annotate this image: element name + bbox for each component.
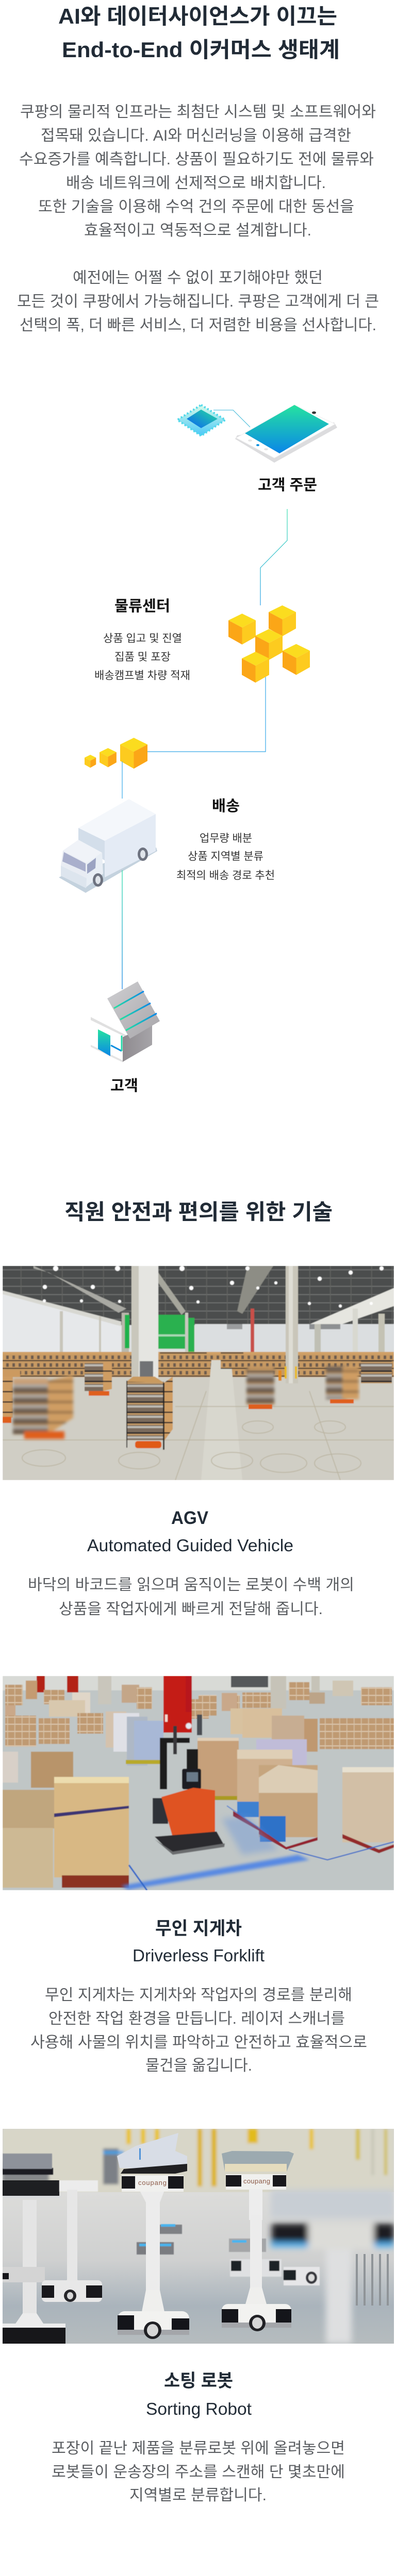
ceiling lights bbox=[43, 1266, 384, 1308]
coupang robot labels: coupang bbox=[138, 2179, 167, 2187]
floor markings bbox=[3, 1391, 394, 1480]
forklift bbox=[160, 1738, 167, 1789]
intro text block: 또한 기술을 이용해 수억 건의 주문에 대한 동선을 bbox=[38, 198, 354, 215]
intro text block: 효율적이고 역동적으로 설계합니다. bbox=[84, 222, 311, 239]
intro text block: 쿠팡의 물리적 인프라는 최첨단 시스템 및 소프트웨어와 bbox=[20, 104, 376, 121]
panel: AGV bbox=[3, 1266, 396, 1618]
sorting robot title: 소팅 로봇 bbox=[164, 2371, 233, 2391]
fulfillment center text: 물류센터 bbox=[114, 598, 170, 615]
icon: phone bbox=[235, 405, 337, 463]
arrow: order to fulfillment center bbox=[260, 509, 287, 605]
fulfillment center text bbox=[94, 598, 190, 682]
title: End-to-End 이커머스 생태계 bbox=[62, 38, 340, 62]
left posts bbox=[23, 2200, 37, 2313]
intro text block: 모든 것이 쿠팡에서 가능해집니다. 쿠팡은 고객에게 더 큰 bbox=[17, 293, 379, 310]
forklift subtitle: Driverless Forklift bbox=[133, 1946, 265, 1965]
forklift description: 안전한 작업 환경을 만듭니다. 레이저 스캐너를 bbox=[48, 2010, 345, 2027]
blue floor lines bbox=[121, 1855, 309, 1890]
arrow: cubes to truck bbox=[122, 761, 123, 799]
intro text block: 접목돼 있습니다. AI와 머신러닝을 이용해 급격한 bbox=[41, 127, 351, 144]
coupang robot labels bbox=[138, 2180, 270, 2187]
fulfillment center text: 배송캠프별 차량 적재 bbox=[94, 670, 190, 682]
ecosystem flow diagram bbox=[59, 405, 337, 1094]
blurred foreground robot bbox=[271, 2190, 394, 2344]
intro text block bbox=[17, 104, 379, 334]
distant robot racks bbox=[246, 1360, 392, 1409]
intro text block: 배송 네트워크에 선제적으로 배치합니다. bbox=[66, 175, 326, 192]
forklift description: 물건을 옮깁니다. bbox=[145, 2057, 252, 2074]
panel: sorting robot bbox=[3, 2129, 394, 2504]
arrow: chip to phone bbox=[213, 410, 250, 427]
icon: warehouse cubes bbox=[228, 605, 310, 683]
delivery text: 업무량 배분 bbox=[200, 833, 252, 844]
sorting robot description bbox=[52, 2440, 345, 2504]
delivery text bbox=[176, 798, 275, 882]
fulfillment center text: 상품 입고 및 진열 bbox=[103, 633, 182, 645]
sorting robot description: 로봇들이 운송장의 주소를 스캔해 단 몇초만에 bbox=[52, 2464, 345, 2481]
arrow: cubes to delivery cubes bbox=[146, 677, 266, 752]
icon: house bbox=[91, 981, 160, 1062]
sorting robot description: 포장이 끝난 제품을 분류로봇 위에 올려놓으면 bbox=[52, 2440, 345, 2457]
intro text block: 수요증가를 예측합니다. 상품이 필요하기도 전에 물류와 bbox=[19, 151, 374, 168]
AGV title: AGV bbox=[171, 1508, 209, 1528]
mid pallets bbox=[192, 1699, 209, 1719]
left black tray robot bbox=[3, 2168, 53, 2175]
label: customer order: 고객 주문 bbox=[258, 477, 317, 494]
photo: forklift bbox=[3, 1676, 394, 1890]
photo: sorting robots bbox=[3, 2129, 394, 2344]
photo: AGV warehouse bbox=[3, 1266, 396, 1480]
sorting robot description: 지역별로 분류합니다. bbox=[129, 2487, 267, 2504]
big racks bbox=[13, 1375, 73, 1439]
delivery text: 상품 지역별 분류 bbox=[188, 851, 263, 862]
distant robots bbox=[137, 2224, 320, 2285]
icon: chip bbox=[177, 405, 225, 436]
title bbox=[58, 4, 340, 62]
fulfillment center text: 집품 및 포장 bbox=[114, 651, 171, 663]
icon: delivery cubes bbox=[85, 738, 147, 769]
coupang robot labels: coupang bbox=[243, 2177, 270, 2185]
robot B bbox=[222, 2151, 294, 2331]
railing bbox=[356, 2254, 389, 2306]
forklift description: 사용해 사물의 위치를 파악하고 안전하고 효율적으로 bbox=[30, 2034, 367, 2051]
AGV subtitle: Automated Guided Vehicle bbox=[87, 1536, 293, 1555]
title: AI와 데이터사이언스가 이끄는 bbox=[58, 4, 337, 28]
intro text block: 선택의 폭, 더 빠른 서비스, 더 저렴한 비용을 선사합니다. bbox=[20, 317, 376, 334]
forklift description bbox=[30, 1987, 367, 2074]
icon: truck bbox=[59, 799, 157, 893]
delivery text: 배송 bbox=[212, 798, 240, 815]
heading: technology for employee safety: 직원 안전과 편의를 위한 기술 bbox=[64, 1200, 333, 1224]
forklift description: 무인 지게차는 지게차와 작업자의 경로를 분리해 bbox=[45, 1987, 352, 2004]
left pallets bbox=[3, 1790, 54, 1828]
arrow: truck to customer bbox=[122, 870, 123, 989]
AGV description: 바닥의 바코드를 읽으며 움직이는 로봇이 수백 개의 bbox=[28, 1577, 354, 1594]
AGV description bbox=[28, 1577, 354, 1618]
delivery text: 최적의 배송 경로 추천 bbox=[176, 870, 275, 882]
intro text block: 예전에는 어쩔 수 없이 포기해야만 했던 bbox=[73, 269, 323, 286]
AGV description: 상품을 작업자에게 빠르게 전달해 줍니다. bbox=[59, 1601, 323, 1618]
robot A bbox=[117, 2133, 189, 2339]
forklift title: 무인 지게차 bbox=[155, 1919, 242, 1939]
panel: driverless forklift bbox=[3, 1676, 394, 2074]
sorting robot subtitle: Sorting Robot bbox=[146, 2399, 252, 2418]
red column bbox=[163, 1676, 192, 1733]
far pallets bbox=[5, 1681, 392, 1747]
label: customer: 고객 bbox=[110, 1077, 138, 1094]
pallets right bbox=[342, 1767, 394, 1842]
